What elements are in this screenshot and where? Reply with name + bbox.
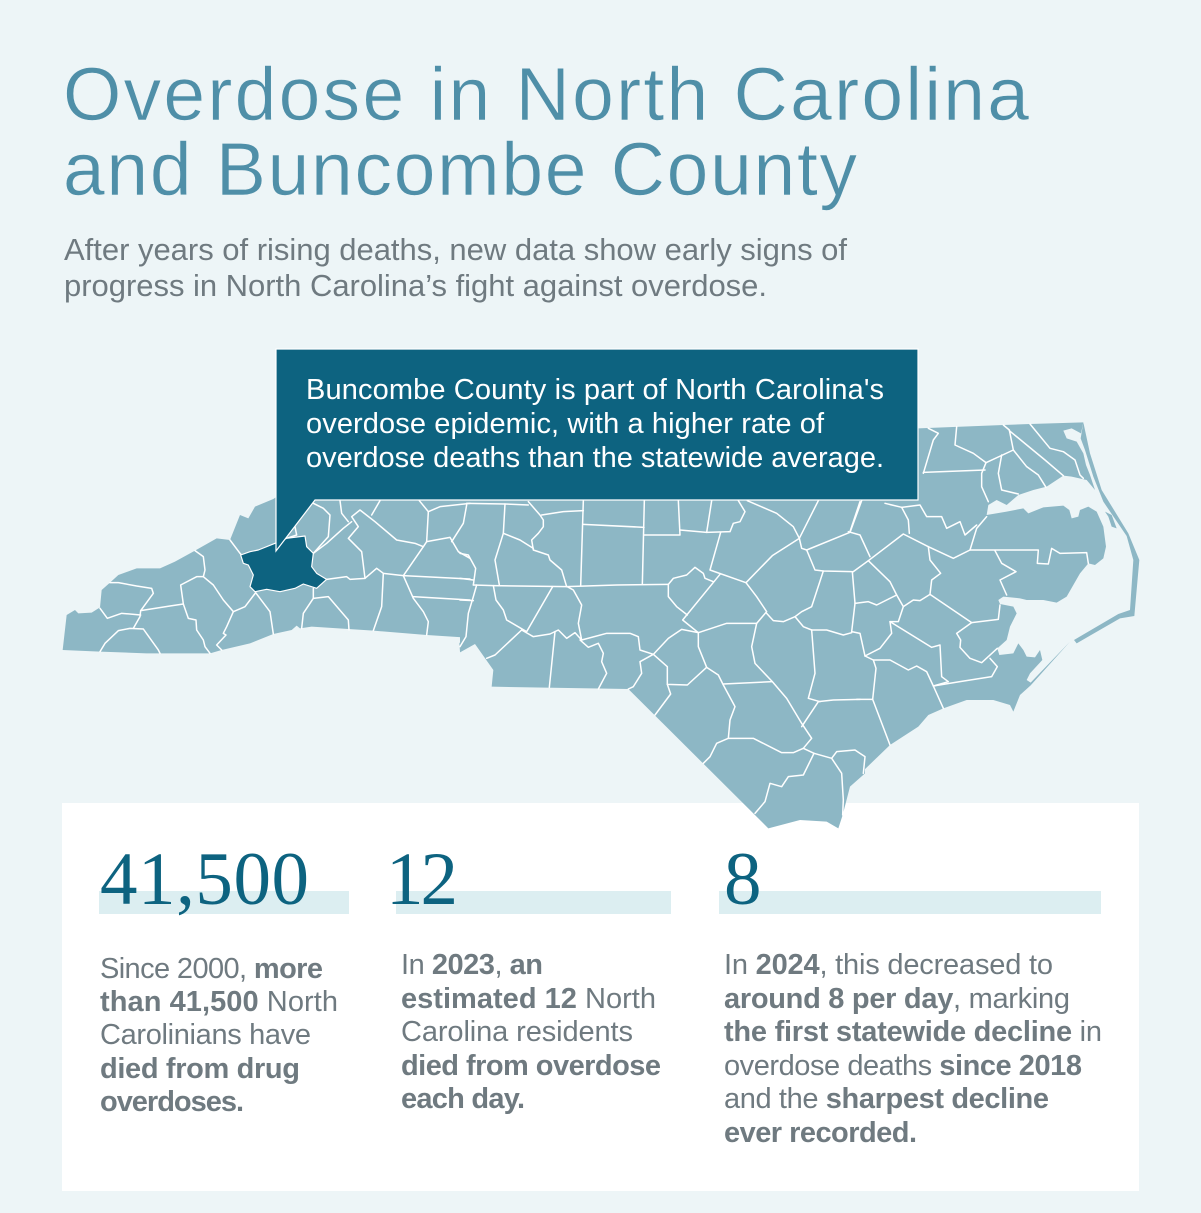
- stat: 41,500: died from drug: [100, 1053, 300, 1085]
- stat: 12: [386, 838, 671, 1115]
- stat: 8: [719, 838, 1102, 1149]
- title: [63, 52, 1029, 211]
- stat: 8: ever recorded.: [724, 1117, 917, 1149]
- panel: statistics background: [62, 803, 1139, 1191]
- callout: Buncombe County: overdose epidemic, with a higher rate of: [306, 408, 825, 440]
- stat: 12: each day.: [401, 1083, 525, 1115]
- stat: 8: and the sharpest decline: [724, 1083, 1049, 1115]
- stat: 12: 12: [386, 838, 458, 921]
- callout: Buncombe County: Buncombe County is part of North Carolina's: [306, 374, 884, 406]
- title: and Buncombe County: [63, 127, 858, 211]
- stat: 8: overdose deaths since 2018: [724, 1050, 1082, 1082]
- stat: 41,500: overdoses.: [100, 1086, 244, 1118]
- subtitle: After years of rising deaths, new data show early signs of: [64, 232, 847, 267]
- title: Overdose in North Carolina: [63, 52, 1029, 136]
- stat: 12: Carolina residents: [401, 1016, 633, 1048]
- subtitle: progress in North Carolina’s fight against overdose.: [64, 268, 767, 303]
- stat: 41,500: Carolinians have: [100, 1019, 311, 1051]
- stat: 12: estimated 12 North: [401, 983, 656, 1015]
- stat: 8: 8: [724, 838, 762, 921]
- stat: 41,500: Since 2000, more: [100, 953, 323, 985]
- subtitle: [64, 232, 847, 303]
- map: North Carolina counties: [63, 410, 1139, 828]
- stat: 41,500: [99, 838, 349, 1118]
- stat: 8: the first statewide decline in: [724, 1016, 1102, 1048]
- stat: 41,500: 41,500: [100, 838, 309, 921]
- stat: 8: In 2024, this decreased to: [724, 949, 1053, 981]
- stat: 12: died from overdose: [401, 1050, 661, 1082]
- callout: Buncombe County: overdose deaths than the statewide average.: [306, 442, 884, 474]
- stat: 8: around 8 per day, marking: [724, 983, 1070, 1015]
- county: Buncombe highlighted: [241, 536, 327, 592]
- stat: 12: In 2023, an: [401, 949, 543, 981]
- callout: Buncombe County: [276, 349, 918, 551]
- stat: 41,500: than 41,500 North: [100, 986, 338, 1018]
